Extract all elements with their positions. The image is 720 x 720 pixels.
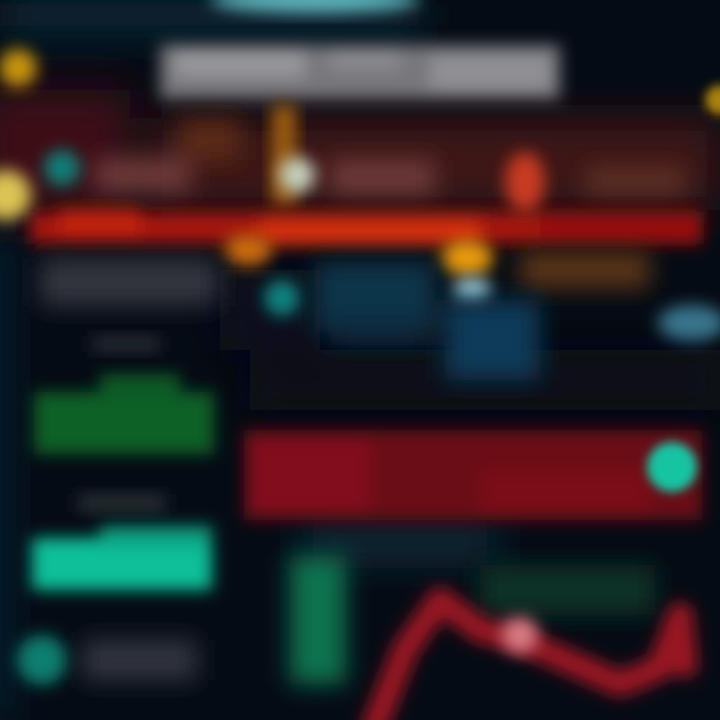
small label above teal bar: [78, 494, 166, 512]
red line chart: [375, 600, 685, 720]
chart highlight dot: [502, 617, 538, 653]
icon: teal circle in red panel: [647, 442, 697, 492]
icon: white node: [279, 157, 315, 193]
icon: pale blue node: [453, 277, 491, 303]
icon: red node: [505, 152, 545, 212]
icon: top right yellow dot: [705, 85, 720, 115]
icon: teal node: [44, 150, 80, 186]
orange vertical stem: [272, 105, 296, 205]
blue middle panels: [315, 262, 540, 380]
light blue pill: [658, 305, 720, 341]
title: [160, 45, 560, 99]
red panel: [244, 430, 702, 520]
icon: top left yellow dot: [0, 49, 37, 87]
dark green chart area: [480, 565, 655, 615]
icon: bottom left teal circle: [17, 635, 67, 685]
small label above green bar: [92, 336, 160, 352]
brown blocks right of timeline: [520, 252, 650, 288]
icon: teal marker: [264, 280, 300, 316]
timeline heading row: [95, 120, 685, 194]
top glow: [210, 0, 420, 13]
left text block: [40, 258, 218, 306]
green block: [34, 374, 214, 454]
icon: yellow orange node: [441, 240, 493, 276]
icon: left yellow node: [0, 170, 31, 220]
timeline nodes: [0, 150, 545, 316]
teal block: [32, 526, 212, 590]
green vertical bar: [290, 556, 346, 684]
red timeline band: [30, 208, 702, 246]
icon: orange node: [224, 234, 272, 266]
bottom left text lines: [82, 640, 197, 680]
